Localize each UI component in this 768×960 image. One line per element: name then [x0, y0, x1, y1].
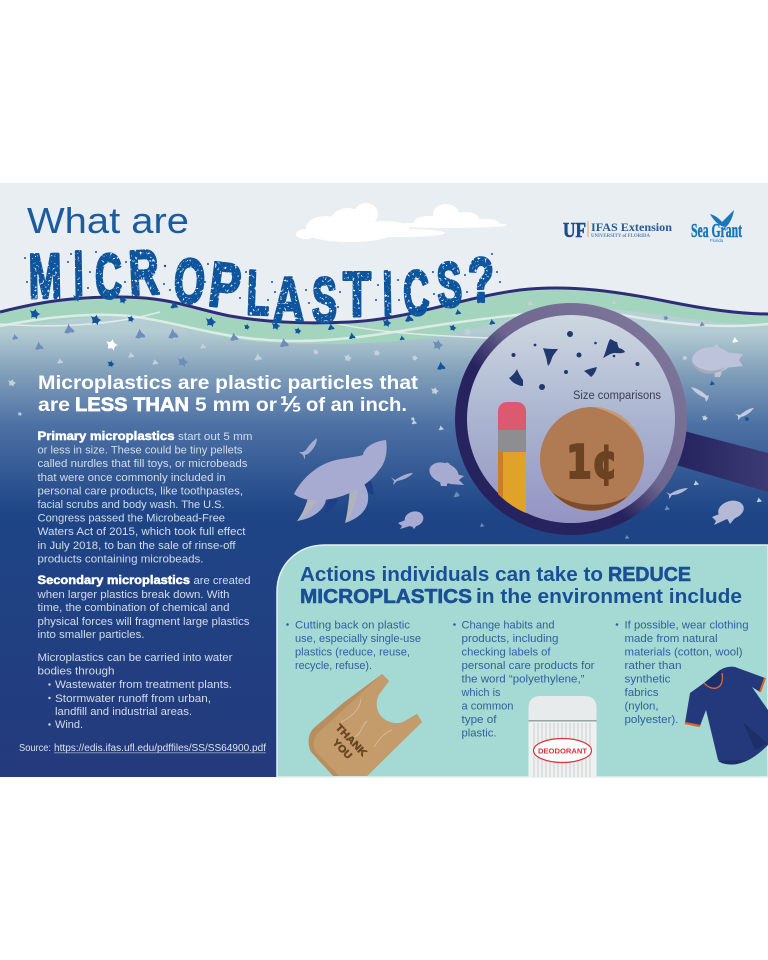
slim fish 5	[666, 488, 688, 499]
text block: primary microplastics: Waters Act of 2015, which took full effect	[38, 526, 246, 538]
sky background	[0, 183, 768, 353]
heading: MICROPLASTICS?: A	[273, 265, 304, 335]
text block: definition headline: ⅕	[280, 394, 301, 416]
dark waterline	[0, 288, 768, 323]
action: natural clothing: If possible, wear clothing	[624, 620, 748, 632]
action: check labels: a common	[462, 700, 514, 712]
text block: how microplastics enter water: Wastewater from treatment plants.	[55, 679, 232, 691]
heading: MICROPLASTICS?: P	[205, 249, 245, 323]
action: cut plastic use: recycle, refuse).	[295, 660, 372, 672]
icon: deodorant	[528, 696, 596, 777]
text block: definition headline: Microplastics are plastic particles that	[38, 372, 419, 394]
fish right large	[692, 344, 743, 377]
text block: how microplastics enter water: Wind.	[55, 719, 83, 731]
action: natural clothing: rather than	[624, 660, 682, 672]
heading: MICROPLASTICS?: C	[402, 258, 430, 329]
handle	[676, 431, 768, 492]
heading: MICROPLASTICS?: O	[172, 246, 207, 318]
panel heading: Actions individuals can take to	[300, 564, 603, 586]
text block: primary microplastics: that were once commonly included in	[38, 472, 226, 484]
action: natural clothing: synthetic	[624, 674, 671, 686]
green surface band	[0, 290, 768, 344]
fish lower left	[398, 509, 425, 529]
panel heading: REDUCE	[608, 564, 691, 586]
heading: MICROPLASTICS?: S	[312, 266, 337, 336]
heading: MICROPLASTICS?: M	[28, 241, 62, 312]
source citation: https://edis.ifas.ufl.edu/pdffiles/SS/SS64900.pdf	[54, 742, 266, 754]
heading: What are: What are	[27, 200, 189, 241]
action: check labels: products, including	[462, 633, 558, 645]
sea with gradient	[0, 288, 768, 777]
action: natural clothing: (nylon,	[624, 700, 658, 712]
text block: secondary microplastics: when larger plastics break down. With	[36, 589, 230, 601]
heading: MICROPLASTICS?: I	[73, 239, 84, 309]
action: check labels: plastic.	[462, 728, 496, 740]
heading: MICROPLASTICS?: R	[127, 238, 161, 309]
penny	[540, 407, 644, 511]
bag label: THANK	[333, 722, 369, 759]
icon: shirt	[685, 667, 768, 765]
action: check labels: the word “polyethylene,”	[462, 674, 585, 686]
bag label	[330, 722, 369, 762]
text block: definition headline: are	[38, 394, 70, 416]
action: natural clothing: materials (cotton, wool)	[624, 646, 743, 658]
lens particles	[509, 331, 640, 390]
text block: how microplastics enter water: landfill and industrial areas.	[55, 706, 192, 718]
action: check labels	[453, 620, 595, 740]
heading: MICROPLASTICS?: S	[435, 250, 464, 321]
heading: MICROPLASTICS?	[24, 238, 501, 336]
heading: MICROPLASTICS?: L	[246, 258, 271, 329]
text block: definition headline: LESS THAN	[75, 394, 189, 416]
bag label: YOU	[330, 737, 354, 762]
text block: primary microplastics: Primary microplastics	[38, 430, 174, 443]
logo: UF IFAS Extension: UNIVERSITY of FLORIDA	[591, 234, 651, 239]
panel heading: in the environment include	[476, 586, 742, 608]
heading: MICROPLASTICS?: ?	[467, 245, 495, 316]
text block: definition headline: of an inch.	[306, 394, 407, 416]
slim fish 3	[691, 387, 709, 402]
slim fish 2	[391, 473, 413, 485]
heading: MICROPLASTICS?: C	[95, 242, 122, 312]
slim fish 4	[735, 408, 754, 420]
text block: secondary microplastics: time, the combination of chemical and	[38, 602, 230, 614]
text block: primary microplastics: called nurdles that fill toys, or microbeads	[38, 458, 248, 470]
fish left	[427, 459, 464, 487]
action: natural clothing	[616, 620, 748, 726]
action: check labels: Change habits and	[462, 620, 554, 632]
text block: definition headline	[38, 372, 419, 416]
icon: plastic bag	[309, 674, 422, 776]
logo: UF IFAS Extension	[563, 218, 673, 242]
text block: primary microplastics: or less in size. These could be tiny pellets	[38, 444, 243, 456]
text block: secondary microplastics	[36, 574, 251, 641]
text block: primary microplastics: products containing microbeads.	[38, 554, 204, 566]
panel heading: MICROPLASTICS	[300, 586, 472, 608]
text block: secondary microplastics: physical forces will fragment large plastics	[38, 616, 250, 628]
foam wave lines	[0, 312, 768, 341]
logo: Sea Grant Florida: Florida	[710, 238, 723, 243]
text block: how microplastics enter water: Stormwater runoff from urban,	[55, 693, 211, 705]
source citation: Source:	[19, 742, 51, 754]
action: check labels: personal care products for	[462, 660, 595, 672]
action: check labels: which is	[461, 687, 501, 699]
action: check labels: checking labels of	[462, 646, 551, 658]
text block: primary microplastics	[38, 430, 252, 566]
text block: how microplastics enter water: bodies through	[38, 666, 114, 678]
logo: Sea Grant Florida	[691, 210, 742, 243]
action: natural clothing: fabrics	[624, 687, 659, 699]
label: size comparisons: Size comparisons	[573, 390, 661, 402]
action: cut plastic use	[286, 620, 421, 672]
text block: primary microplastics: in July 2018, to ban the sale of rinse-off	[38, 540, 236, 552]
logo: UF IFAS Extension: IFAS Extension	[591, 222, 673, 234]
panel: actions to reduce microplastics	[277, 545, 768, 777]
panel heading	[300, 564, 742, 608]
text block: how microplastics enter water	[38, 652, 233, 731]
lens ring	[461, 309, 681, 529]
penny value: 1¢	[566, 435, 618, 489]
text block: secondary microplastics: Secondary microplastics	[38, 574, 190, 587]
heading: MICROPLASTICS?: I	[382, 259, 393, 329]
heading: MICROPLASTICS?: T	[343, 260, 371, 330]
action: natural clothing: polyester).	[624, 714, 678, 726]
text block: definition headline: 5 mm or	[195, 394, 277, 416]
fish group	[299, 344, 754, 529]
text block: primary microplastics: facial scrubs and body wash. The U.S.	[38, 499, 224, 511]
fish lower right	[712, 498, 746, 525]
action: natural clothing: made from natural	[624, 633, 718, 645]
text block: primary microplastics: start out 5 mm	[178, 431, 252, 443]
action: cut plastic use: Cutting back on plastic	[295, 620, 410, 632]
action: check labels: type of	[462, 714, 497, 726]
logo: UF IFAS Extension: UF	[563, 218, 586, 242]
sea turtle	[294, 440, 387, 523]
action: cut plastic use: use, especially single-use	[295, 633, 421, 645]
magnifying glass	[461, 309, 768, 529]
text block: secondary microplastics: are created	[194, 575, 250, 587]
action: cut plastic use: plastics (reduce, reuse,	[295, 646, 410, 658]
pencil	[498, 402, 526, 513]
text block: how microplastics enter water: Microplastics can be carried into water	[38, 652, 233, 664]
deodorant label: DEODORANT	[538, 746, 587, 756]
slim fish	[299, 438, 317, 460]
text block: primary microplastics: Congress passed the Microbead-Free	[38, 512, 225, 524]
text block: primary microplastics: personal care products, like toothpastes,	[38, 486, 243, 498]
text block: secondary microplastics: into smaller particles.	[38, 629, 144, 641]
cloud	[296, 203, 507, 242]
floating plastic particles	[8, 294, 762, 539]
